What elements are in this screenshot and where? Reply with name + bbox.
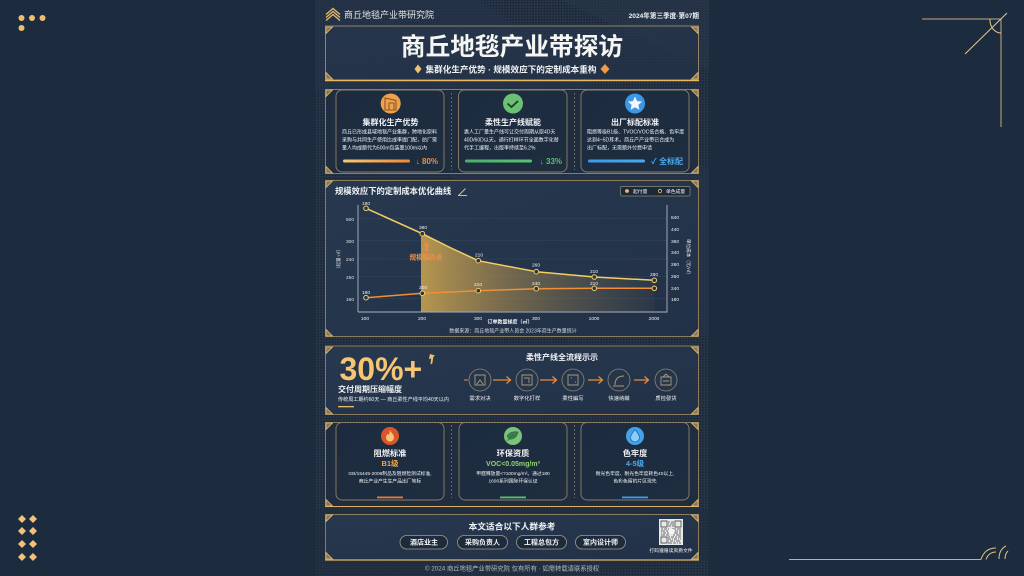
chart plot: 210: [474, 282, 482, 288]
chart heading: 规模效应下的定制成本优化曲线: [335, 186, 452, 196]
left axis labels: [335, 217, 354, 303]
card: factory standards: 出厂标配标准: [611, 117, 659, 127]
title panel: [325, 26, 699, 80]
decoration: bottom-right line and arcs: [789, 546, 1008, 560]
card: fire rating: B1级: [381, 458, 399, 468]
x axis labels: 1000: [589, 316, 600, 322]
audience tags: 酒店业主: [410, 538, 438, 547]
icon: up arrow: [429, 354, 435, 364]
chart plot: 180: [362, 201, 370, 207]
card: flexible production: 柔性生产线赋能: [485, 117, 541, 127]
x axis labels: 100: [361, 316, 369, 322]
process steps: 快速纳織: [608, 394, 630, 402]
chart plot: 280: [650, 272, 658, 278]
panel: target audience: [325, 514, 699, 560]
process heading: 柔性产线全流程示示: [526, 352, 598, 362]
line: unit cost: [366, 208, 654, 280]
card: flexible production: ↓ 33%: [540, 157, 562, 166]
left axis labels: 160: [346, 297, 354, 303]
subtitle: 集群化生产优势 · 规模效应下的定制成本重构: [426, 64, 597, 74]
chart plot: 180: [362, 290, 370, 296]
panel: cost curve chart: [326, 180, 698, 336]
audience tags: 工程总包方: [524, 538, 559, 547]
chart plot: 380: [419, 225, 427, 231]
panel: target audience: 本文适合以下人群参考: [469, 520, 556, 532]
card: eco grade: 1600系列国际环保认证: [488, 478, 538, 484]
x axis labels: 300: [474, 316, 482, 322]
decoration: top-right corner lines: [922, 13, 1007, 127]
annotation: scale inflection point: [410, 242, 443, 262]
icon: factory: [381, 94, 401, 114]
chart plot: 260: [532, 262, 540, 268]
icon: check: [503, 94, 523, 114]
card: cluster advantage: 量人均成额代为500m包装量100m以内: [342, 144, 427, 152]
header bar: [326, 8, 699, 20]
card: fire rating: 商丘产业产生生产品出厂地标: [359, 478, 421, 484]
right axis labels: [671, 215, 692, 303]
x axis labels: 200: [418, 316, 426, 322]
card: cluster advantage: 集群化生产优势: [362, 117, 418, 127]
legend: 单色成量: [666, 188, 685, 195]
card: flexible production: 惠人工厂量生产线可让交付周期从原4D天: [464, 128, 555, 136]
chart plot: 240: [532, 281, 540, 287]
process steps: 质检發货: [655, 394, 677, 402]
card: colour fastness: [581, 422, 689, 500]
left axis labels: 500: [346, 217, 354, 223]
right axis labels: 180: [671, 297, 679, 303]
panel: quality standards: [325, 422, 699, 506]
decoration: bottom-left diamonds: [18, 515, 37, 561]
card: eco grade: [459, 422, 567, 500]
card: cluster advantage: [336, 90, 444, 172]
chart plot: 210: [475, 252, 483, 258]
left axis labels: 300: [346, 239, 354, 245]
audience tags: [400, 536, 626, 549]
right axis labels: 单位成本（元/㎡）: [685, 239, 692, 277]
chart plot: [335, 201, 692, 326]
card: flexible production: 40D/60D以天。通行打样环节全面数字化替: [464, 136, 559, 144]
right axis labels: 260: [671, 274, 679, 280]
card: colour fastness: 4-5级: [626, 458, 645, 468]
right axis labels: 280: [671, 262, 679, 268]
card: factory standards: 达到4~5D耳术。商丘产产业带已合成为: [587, 136, 674, 144]
chart plot: 200: [419, 285, 427, 291]
left axis labels: 240: [346, 257, 354, 263]
card: eco grade: 甲醛释放量<?100mg/m²。通过180: [476, 470, 550, 477]
card: cluster advantage: 商丘已形成县域地毯产业集群，跨地化原料: [342, 128, 437, 136]
right axis labels: 240: [671, 286, 679, 292]
icon: flame: [381, 427, 399, 445]
card: fire rating: GB/15445-2006制品及阻燃检测试标准,: [348, 470, 432, 477]
card: flexible production: [458, 90, 567, 172]
central poster background: [315, 0, 709, 576]
card: factory standards: ✓ 全标配: [651, 156, 683, 166]
process steps: [464, 369, 677, 402]
legend: [620, 186, 690, 196]
x axis labels: 300: [532, 316, 540, 322]
panel: three advantages: [326, 90, 698, 174]
panel: delivery and process: 交付周期压缩幅度: [338, 384, 402, 394]
icon: star: [625, 94, 645, 114]
header bar: 商丘地毯产业带研究院: [344, 9, 434, 20]
x axis labels: 订单数量梯度（㎡）: [487, 318, 533, 326]
left axis labels: （起量·㎡）: [335, 247, 342, 271]
card: factory standards: 阻燃等级B1级、TVOC/VOC低合格、色牢度: [587, 128, 684, 136]
x axis labels: 2000: [649, 316, 660, 322]
chart plot: 210: [590, 281, 598, 287]
main title: 商丘地毯产业带探访: [401, 33, 623, 61]
process steps: 需求对决: [469, 394, 491, 402]
panel: delivery and process: [326, 346, 698, 414]
icon: leaf: [504, 427, 522, 445]
process steps: 数字化打样: [514, 394, 540, 402]
right axis labels: 360: [671, 239, 679, 245]
footer copyright: © 2024 商丘地毯产业带研究院 仅有所有 · 如需转载请联系授权: [425, 564, 600, 572]
x axis labels: [361, 316, 660, 326]
QR code: [659, 519, 683, 545]
card: eco grade: 环保资质: [497, 448, 529, 458]
process steps: 柔性編写: [562, 394, 584, 402]
card: eco grade: VOC<0.05mg/m³: [486, 461, 541, 468]
legend: 起付量: [633, 188, 648, 195]
annotation: scale inflection point: 规模临价点: [410, 252, 443, 262]
card: flexible production: 代手工编程，出版率持续至6.2%: [464, 144, 536, 152]
card: factory standards: 出厂标配，无需额外付费申请: [587, 144, 652, 152]
decoration: top-left dots: [18, 15, 46, 31]
panel: delivery and process: 传统周工期约60天 — 商丘柔性产线平均40天以内: [338, 396, 449, 403]
big stat: 30%+: [340, 351, 422, 387]
card: colour fastness: 色牢度: [623, 448, 647, 458]
right axis labels: 840: [671, 215, 679, 221]
audience tags: 室内设计师: [583, 538, 618, 547]
card: colour fastness: 色彩色留钓片区现先: [613, 478, 657, 484]
icon: institute logo: [326, 8, 340, 20]
right axis labels: 340: [671, 250, 679, 256]
line: minimum order: [366, 288, 654, 298]
header bar: 2024年第三季度·第07期: [629, 11, 699, 20]
shaded area: [421, 233, 654, 312]
card: colour fastness: 耐光色牢度、耐光色牢度耗色40以上,: [596, 470, 674, 477]
data source: 数据来源：商丘地毯产业带人员会 2023年商生产数量统计: [449, 328, 577, 334]
icon: water drop: [626, 427, 644, 445]
card: fire rating: 阻燃标准: [374, 448, 406, 458]
card: fire rating: [336, 422, 444, 500]
card: cluster advantage: ↓ 80%: [416, 157, 438, 166]
panel: target audience: 打码遵循读资质文件: [649, 547, 693, 554]
right axis labels: 440: [671, 227, 679, 233]
left axis labels: 250: [346, 275, 354, 281]
icon: pencil: [458, 188, 467, 196]
chart plot: 210: [590, 269, 598, 275]
card: cluster advantage: 采购与共同生产使用比成率提门配，纺厂需: [342, 136, 437, 144]
card: factory standards: [581, 90, 689, 172]
audience tags: 采购负责人: [465, 538, 500, 547]
